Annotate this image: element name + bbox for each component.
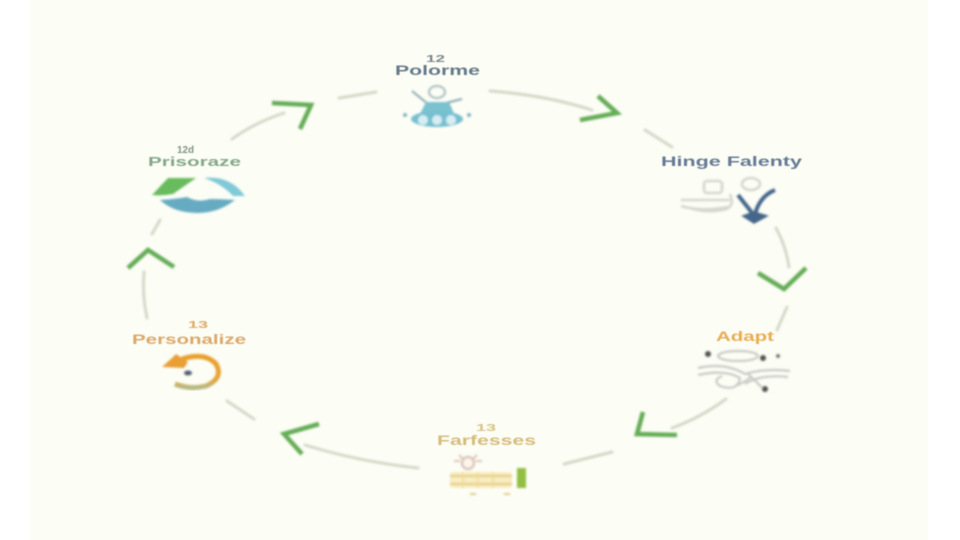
heading: Hinge Falenty: Hinge Falenty [661, 154, 803, 169]
heading: Prisoraze [148, 145, 241, 169]
heading: Farfesses: Farfesses [437, 433, 536, 448]
step: Adapt [698, 329, 790, 392]
icon: sun, grid and green bar [450, 455, 526, 494]
heading: Polorme: 12 [426, 54, 446, 65]
heading: Prisoraze: 12d [177, 145, 194, 156]
step: Prisoraze [148, 145, 245, 213]
connector arcs [143, 91, 789, 468]
green arrowheads [128, 96, 806, 454]
icon: green and blue loop [152, 178, 245, 213]
step: Personalize [132, 320, 247, 388]
heading: Polorme [395, 54, 481, 78]
heading: Personalize: Personalize [132, 332, 247, 347]
icon: circular orange arrow [162, 354, 218, 388]
heading: Polorme: Polorme [395, 63, 481, 78]
heading: Personalize [132, 320, 247, 347]
heading: Prisoraze: Prisoraze [148, 154, 241, 169]
step: Polorme [395, 54, 481, 127]
step: Hinge Falenty [661, 154, 803, 223]
heading: Farfesses: 13 [476, 423, 497, 434]
icon: swirling lines [698, 351, 790, 392]
step: Farfesses [437, 423, 536, 494]
icon: figure over circles [403, 86, 471, 127]
icon: shapes with blue arrow [681, 178, 775, 223]
heading: Farfesses [437, 423, 536, 448]
heading: Personalize: 13 [188, 320, 209, 331]
cycle ring: connector arcs and arrows [128, 91, 806, 468]
heading: Adapt: Adapt [716, 329, 775, 344]
